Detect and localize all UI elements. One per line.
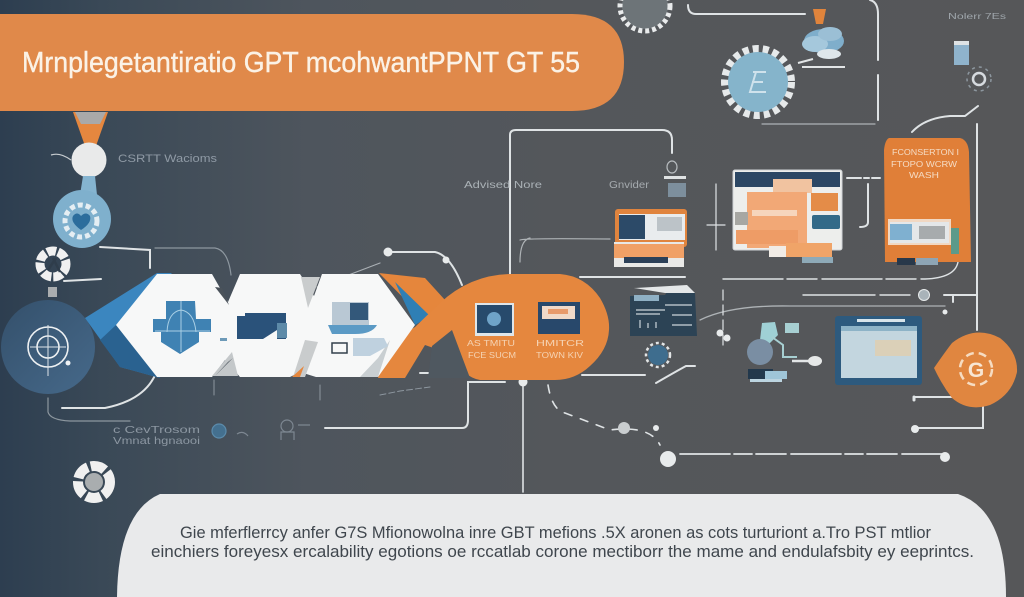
title text: Mrnplegetantiratio GPT mcohwantPPNT GT 55 <box>22 47 580 79</box>
card: right: TOWN KIV <box>536 350 583 360</box>
connector lines <box>48 0 983 492</box>
icon: small gear <box>646 343 670 367</box>
card heading text: FCONSERTON I <box>892 147 959 157</box>
orange panel cards <box>467 302 584 360</box>
card: left: FCE SUCM <box>468 350 516 360</box>
icon: cloud with orange cup <box>798 9 845 67</box>
connector nodes <box>384 248 950 467</box>
blue node with heart icon <box>53 176 111 248</box>
label: CSRTT Wacioms: CSRTT Wacioms <box>118 153 218 165</box>
orange G badge: G <box>968 359 984 382</box>
summary text <box>151 523 974 561</box>
icon: bottom gear <box>78 466 110 498</box>
card: left: AS TMITU <box>467 338 515 348</box>
icon: white gear <box>40 251 66 297</box>
label: conversion note: Vmnat hgnaooi <box>113 435 200 447</box>
label: Gnvider: Gnvider <box>609 180 650 191</box>
white hexagon band <box>116 274 415 377</box>
icon: document stack <box>328 302 388 356</box>
dark circle target icon <box>1 300 95 394</box>
monitor <box>835 316 922 385</box>
top right label and icons: Nolerr 7Es <box>948 11 1006 21</box>
summary text: Gie mferflerrcy anfer G7S Mfionowolna inre GBT mefions .5X aronen as cots turturiont a.Tro PST mtlior <box>180 523 931 542</box>
title banner <box>0 14 624 111</box>
card: right: HMITCR <box>536 338 584 348</box>
orange G badge <box>934 333 1017 407</box>
label: Advised Nore: Advised Nore <box>464 180 543 191</box>
icon: blue shield <box>153 301 211 354</box>
faint small icons <box>212 420 310 440</box>
card heading text <box>891 147 959 180</box>
dark data card <box>630 285 697 336</box>
summary text: einchiers foreyesx ercalability egotions oe rccatlab corone mectiborr the mame and endulafsbity ey eeprintcs. <box>151 542 974 561</box>
blue chevron <box>85 273 172 378</box>
label: conversion note <box>113 424 200 447</box>
top node: white circle <box>51 142 106 178</box>
card: right <box>536 302 584 360</box>
icon: small device stack <box>664 161 686 197</box>
bottom summary panel <box>117 494 1006 597</box>
icon: dark chart <box>220 313 287 341</box>
icon: large blue gear <box>725 49 791 115</box>
small orange-top card <box>614 209 687 267</box>
card screen <box>888 219 959 265</box>
orange document card <box>884 138 971 265</box>
funnel under title <box>73 112 108 146</box>
card heading text: WASH <box>909 170 939 180</box>
icon: gear top <box>620 0 670 31</box>
card: left <box>467 303 516 360</box>
label: conversion note: c CevTrosom <box>113 424 200 436</box>
top right label and icons <box>948 11 1006 91</box>
icon: person at desk <box>747 322 822 382</box>
orange X ribbon <box>378 273 609 380</box>
web page mockup <box>733 170 842 263</box>
card heading text: FTOPO WCRW <box>891 159 957 169</box>
